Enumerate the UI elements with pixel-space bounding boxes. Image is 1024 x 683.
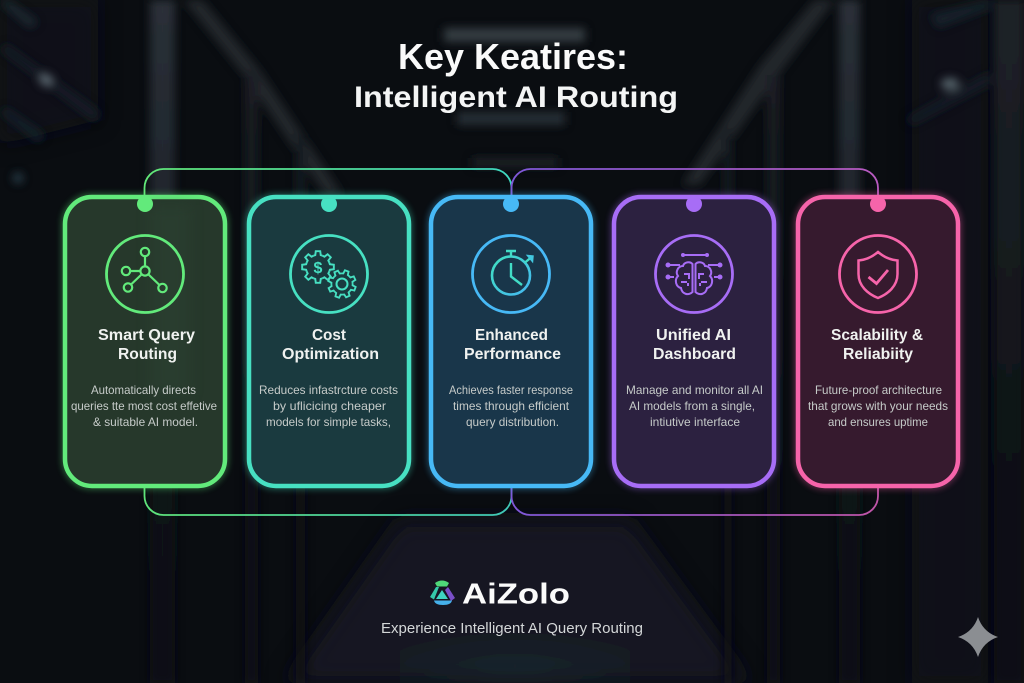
heading: Scalability & <box>831 327 923 344</box>
title: Key Keatires: <box>398 36 628 77</box>
description: Reduces infastrcture costs <box>259 383 398 397</box>
panel: Unified AI Dashboard <box>614 196 774 486</box>
connector dot <box>686 196 702 212</box>
panel: Cost Optimization: Optimization <box>282 346 379 363</box>
description <box>259 383 398 429</box>
panel: Cost Optimization <box>249 196 409 486</box>
title <box>354 36 678 114</box>
panel: Scalability & Reliability: Reliabiity <box>843 346 913 363</box>
description <box>71 383 217 429</box>
heading: Enhanced <box>475 327 548 344</box>
description: times through efficient <box>453 399 570 413</box>
logo: AiZolo <box>430 578 570 610</box>
description: query distribution. <box>466 415 559 429</box>
panel: Smart Query Routing: Routing <box>118 346 177 363</box>
panel: Unified AI Dashboard: Dashboard <box>653 346 736 363</box>
panel: Smart Query Routing <box>65 196 225 486</box>
description: Manage and monitor all AI <box>626 383 763 397</box>
connector: bottom green to blue <box>144 486 512 515</box>
description: models for simple tasks, <box>266 415 391 429</box>
connector dot <box>503 196 519 212</box>
heading: Cost <box>312 327 347 344</box>
description: Automatically directs <box>91 383 196 397</box>
connector: top green to blue <box>144 169 512 198</box>
panel: Scalability & Reliability <box>798 196 958 486</box>
icon: shield with check <box>840 236 916 312</box>
connector dot <box>870 196 886 212</box>
description: AI models from a single, <box>629 399 755 413</box>
description <box>626 383 763 429</box>
title: Intelligent AI Routing <box>354 81 678 114</box>
icon: stopwatch <box>472 236 550 312</box>
description: & suitable AI model. <box>93 415 198 429</box>
description: Achieves faster response <box>449 383 573 397</box>
description: queries tte most cost effetive <box>71 399 217 413</box>
tagline: Experience Intelligent AI Query Routing <box>381 620 643 637</box>
icon: network nodes <box>106 236 184 312</box>
icon: gears with dollar <box>290 236 368 312</box>
description: by uflicicing cheaper <box>273 399 386 413</box>
description <box>808 383 948 429</box>
heading: Unified AI <box>656 327 731 344</box>
icon: logo mark <box>430 580 455 605</box>
description: intiutive interface <box>650 415 740 429</box>
description <box>449 383 573 429</box>
connector dot <box>137 196 153 212</box>
icon: brain circuit <box>656 236 732 312</box>
panel: Enhanced Performance: Performance <box>464 346 561 363</box>
connector: bottom purple to pink <box>512 486 878 515</box>
icon: gears with dollar: $ <box>314 260 323 277</box>
connector dot <box>321 196 337 212</box>
logo: AiZolo: AiZolo <box>462 578 570 610</box>
heading: Smart Query <box>98 327 195 344</box>
connector: top purple to pink <box>512 169 878 198</box>
panel: Enhanced Performance <box>431 196 591 486</box>
description: that grows with your needs <box>808 399 948 413</box>
icon: sparkle watermark <box>958 617 998 657</box>
description: Future-proof architecture <box>815 383 942 397</box>
description: and ensures uptime <box>828 415 928 429</box>
